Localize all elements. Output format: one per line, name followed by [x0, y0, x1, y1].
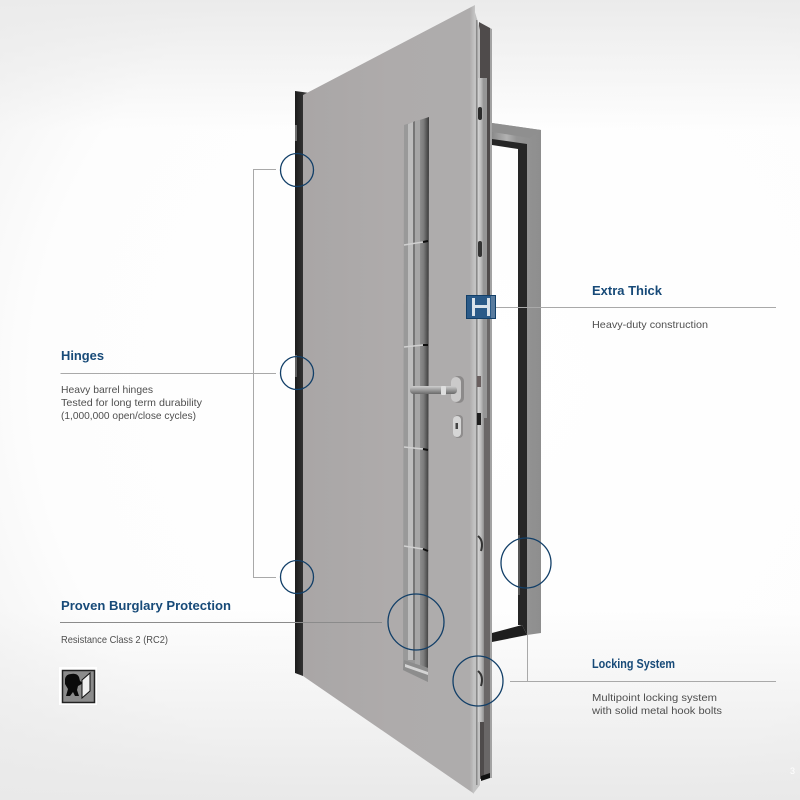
locking description: with solid metal hook bolts	[591, 705, 722, 717]
hinge marker circles	[280, 154, 314, 594]
panel: extra thick	[466, 283, 776, 331]
handle	[410, 376, 464, 438]
icon: thickness marker	[466, 296, 496, 318]
door lock edge	[473, 6, 492, 794]
hinges description: Tested for long term durability	[61, 397, 203, 409]
panel: locking system	[453, 538, 776, 717]
light stile	[473, 6, 480, 794]
marker circles: locking	[453, 538, 551, 706]
outer dark channel	[479, 22, 490, 779]
panel: burglary protection	[59, 594, 444, 705]
heading: burglary protection: Proven Burglary Protection	[61, 598, 231, 613]
hinges description: Heavy barrel hinges	[61, 384, 153, 396]
heading: hinges: Hinges	[61, 348, 104, 363]
heading: extra thick: Extra Thick	[592, 283, 663, 298]
door frame	[492, 123, 541, 642]
panel: hinges	[60, 154, 314, 594]
locking description: Multipoint locking system	[592, 692, 717, 704]
window	[403, 117, 429, 682]
window reveal	[403, 117, 429, 682]
leader line: extra thick	[496, 306, 776, 308]
window sill	[403, 660, 428, 682]
extra thick description: Heavy-duty construction	[592, 319, 708, 331]
burglary description: Resistance Class 2 (RC2)	[61, 634, 168, 646]
leader line: burglary	[60, 622, 382, 624]
icon: RC2 burglar	[59, 667, 97, 705]
door illustration	[295, 5, 541, 794]
page number: 3	[790, 766, 795, 776]
heading: locking system: Locking System	[592, 656, 675, 671]
marker circle: burglary	[388, 594, 444, 650]
hinges description: (1,000,000 open/close cycles)	[61, 410, 196, 422]
hinge leader lines	[60, 170, 276, 578]
hinge edge	[295, 91, 310, 676]
metal lock plate	[478, 78, 484, 722]
lock bolts	[478, 107, 482, 120]
door face	[303, 5, 475, 793]
leader lines: locking	[510, 635, 776, 682]
